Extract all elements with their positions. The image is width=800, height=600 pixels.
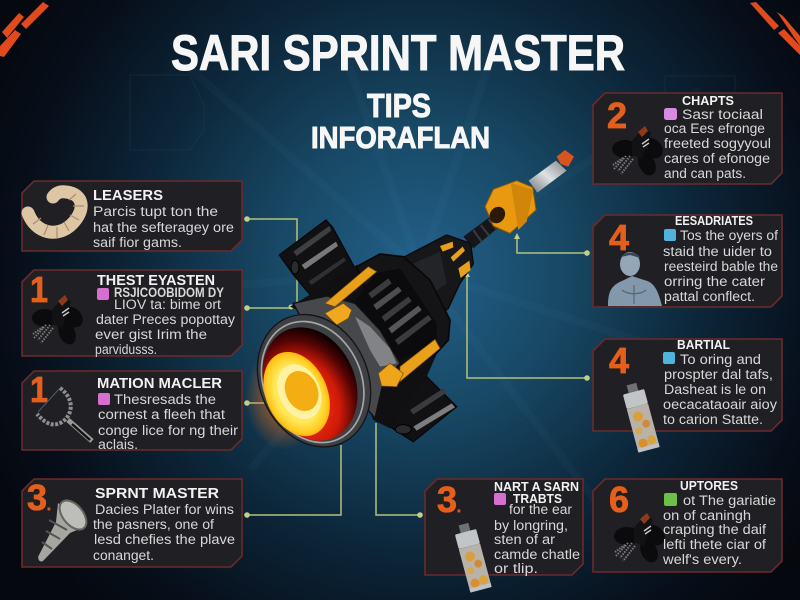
subtitle [311, 87, 490, 155]
text: eesadriates: EESADRIATES [675, 213, 753, 228]
yellow disc [251, 341, 343, 447]
central device: sprint tool [237, 150, 574, 465]
text: uptores: lefti thete ciar of [663, 537, 766, 552]
text: eesadriates: Tos the oyers of [680, 228, 778, 243]
amber bracket: top [325, 267, 377, 325]
text: bartial: Dasheat is le on [664, 382, 766, 397]
icon: bottle [621, 381, 660, 453]
text: sprnt master [93, 485, 235, 563]
icon: black gadget [614, 513, 669, 565]
icon: muscular figure [608, 252, 662, 306]
text: bartial: BARTIAL [677, 337, 730, 352]
rod [529, 161, 567, 193]
background rays [60, 40, 760, 560]
text: thest eyasten [95, 272, 235, 357]
text: mation macler: cornest a fleeh that [98, 407, 225, 422]
text: mation macler: MATION MACLER [97, 375, 222, 392]
text: sprnt master: conanget. [93, 548, 154, 563]
text: thest eyasten: LIOV ta: bime ort [114, 297, 221, 312]
text: chapts: oca Ees efronge [664, 121, 765, 136]
text: nart a sarn: sten of ar [494, 532, 556, 547]
connector lines [244, 216, 590, 518]
text: eesadriates: staid the uider to [663, 244, 772, 259]
ring highlight [243, 305, 383, 459]
text: eesadriates: pattal conflect. [664, 289, 755, 304]
badge [664, 229, 676, 241]
text: uptores: crapting the daif [663, 522, 766, 537]
panel: uptores [593, 478, 782, 572]
corner accent: top left [0, 2, 49, 57]
panel: sprnt master [22, 477, 242, 567]
text: mation macler: Thesresads the [114, 392, 216, 407]
number 3: 3. [27, 477, 51, 518]
corner accent: top right [750, 2, 800, 55]
text: leasers [93, 187, 234, 250]
fin: lower [383, 370, 457, 442]
text: mation macler: conge lice for ng their [98, 423, 239, 438]
text: chapts: and can pats. [664, 166, 746, 181]
number 3: 3. [437, 479, 461, 520]
text: nart a sarn: by longring, [494, 518, 568, 533]
text: thest eyasten: RSJICOOBIDOM DY [114, 285, 224, 300]
text: mation macler: aclais. [98, 437, 138, 452]
text: bartial: to carion Statte. [663, 412, 763, 427]
glow [245, 343, 322, 450]
text: sprnt master: the pasners, one of [93, 517, 214, 532]
amber bracket: bottom [378, 339, 440, 387]
body connector [290, 265, 440, 428]
text: nart a sarn [494, 479, 580, 576]
text: bartial [663, 337, 777, 427]
text: uptores: on of caningh [663, 508, 751, 523]
badge [664, 108, 677, 120]
icon: toothed scraper [37, 388, 92, 441]
collar [485, 181, 536, 233]
text: sprnt master: lesd chefies the plave [94, 532, 235, 547]
neck housing [400, 235, 473, 327]
icon: silver screw [38, 496, 92, 561]
background hexagons [130, 75, 735, 150]
text: eesadriates: reesteird bable the [664, 259, 778, 274]
number 1: 1 [30, 269, 48, 310]
badge [98, 393, 110, 405]
badge [663, 352, 675, 364]
text: nart a sarn: or tlip. [494, 561, 538, 576]
white hot highlights [269, 357, 330, 426]
text: chapts: cares of efonoge [664, 151, 770, 166]
subtitle: INFORAFLAN [311, 120, 490, 155]
subtitle: TIPS [367, 87, 431, 124]
panel: nart a sarn [425, 479, 583, 593]
number 4: 4 [609, 217, 629, 258]
text: leasers: hat the sefteragey ore [93, 220, 234, 235]
icon: segmented worm [28, 192, 84, 238]
number 1: 1 [30, 369, 48, 410]
fin: upper [279, 220, 355, 297]
text: chapts: CHAPTS [682, 93, 734, 108]
text: thest eyasten: ever gist Irim the [95, 327, 207, 342]
orange core [279, 366, 325, 416]
rod tip [557, 150, 574, 167]
badge [494, 493, 506, 505]
text: eesadriates: orring the cater [664, 274, 766, 289]
text: uptores [662, 478, 776, 567]
text: chapts [664, 93, 771, 181]
text: uptores: ot The gariatie [683, 493, 776, 508]
text: bartial: To oring and [680, 352, 761, 367]
text: eesadriates [663, 213, 778, 304]
spring [463, 211, 507, 248]
number 4: 4 [609, 340, 629, 381]
ribbed barrel [353, 268, 437, 360]
text: nart a sarn: NART A SARN [494, 479, 579, 494]
glowing throat [245, 312, 375, 456]
text: chapts: freeted sogyyoul [664, 136, 771, 151]
title: SARI SPRINT MASTER [171, 25, 625, 81]
text: nart a sarn: for the ear [509, 502, 573, 517]
number 6: 6 [609, 479, 629, 520]
badge [97, 288, 109, 300]
text: leasers: saif fior gams. [93, 235, 182, 250]
text: thest eyasten: THEST EYASTEN [97, 272, 215, 289]
front ring [237, 296, 391, 465]
icon: black gadget [32, 295, 87, 347]
text: nart a sarn: camde chatle [494, 547, 580, 562]
panel: bartial [593, 337, 782, 453]
body rear collar [357, 254, 450, 357]
number 2: 2 [607, 95, 627, 136]
text: thest eyasten: parvidusss. [95, 342, 157, 357]
text: sprnt master: SPRNT MASTER [95, 485, 219, 502]
text: bartial: oecacataoair aioy [663, 397, 777, 412]
panel: thest eyasten [22, 269, 242, 357]
icon: black gadget [612, 126, 667, 178]
panel: chapts [593, 93, 782, 184]
text: uptores: UPTORES [680, 478, 738, 493]
text: chapts: Sasr tociaal [682, 107, 763, 122]
text: sprnt master: Dacies Plater for wins [95, 502, 234, 517]
text: uptores: welf's every. [662, 552, 742, 567]
panel: eesadriates [593, 213, 782, 307]
panel: mation macler [22, 369, 242, 452]
text: mation macler [97, 375, 239, 452]
icon: bottle [453, 521, 492, 593]
text: leasers: LEASERS [93, 187, 163, 204]
text: nart a sarn: TRABTS [513, 491, 562, 506]
badge [664, 493, 677, 506]
grey band [293, 296, 400, 418]
text: bartial: prospter dal tafs, [664, 367, 773, 382]
panel: leasers [22, 181, 242, 251]
text: leasers: Parcis tupt ton the [93, 204, 218, 219]
worn metal patch [355, 317, 397, 367]
text: thest eyasten: dater Preces popottay [96, 312, 235, 327]
